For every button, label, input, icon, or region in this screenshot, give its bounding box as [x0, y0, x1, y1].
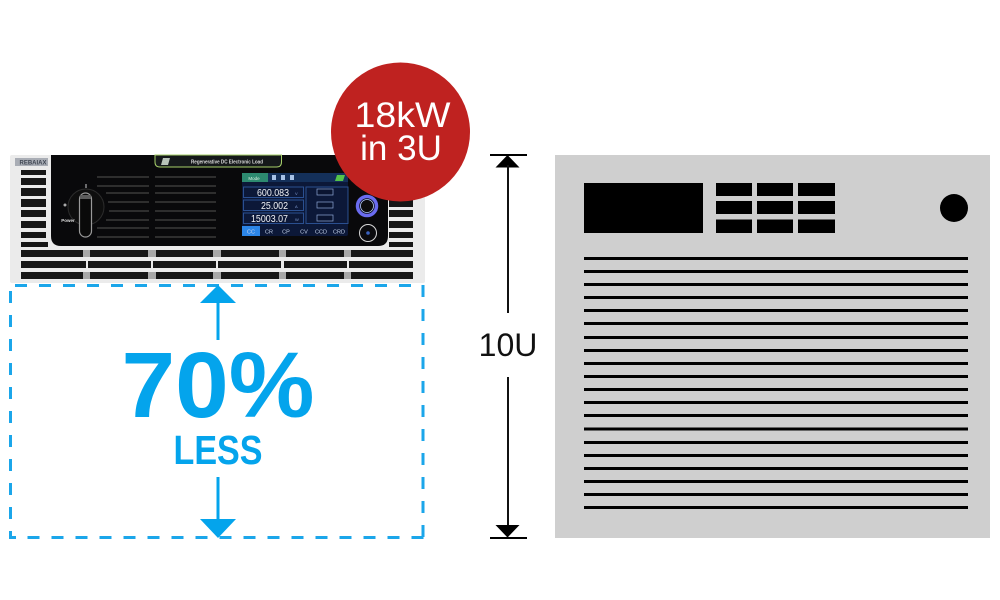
dimension line: 10U height — [479, 154, 537, 539]
red badge: 18kW in 3U: 18kW — [354, 96, 450, 135]
arrow up — [200, 285, 236, 340]
brand logo — [15, 158, 48, 166]
left vent slots — [21, 170, 48, 247]
touch screen: CR — [265, 230, 273, 236]
enter button — [360, 224, 376, 242]
button grid — [716, 183, 835, 233]
dimension line: 10U height: 10U — [479, 327, 537, 363]
model title tab — [155, 155, 282, 167]
red badge: 18kW in 3U — [331, 62, 470, 202]
power rotary switch: Power — [61, 218, 75, 223]
touch screen: CV — [300, 230, 308, 236]
bottom vent slots — [21, 250, 413, 279]
right vent slots — [389, 170, 413, 247]
touch screen: W — [295, 217, 299, 222]
touch screen: 600.083 — [257, 188, 289, 199]
encoder knob with blue ring — [358, 196, 376, 216]
touch screen: CC — [247, 230, 255, 236]
touch screen: 25.002 — [261, 201, 288, 212]
power rotary switch — [61, 184, 104, 237]
70% figure: 70% — [122, 333, 314, 437]
dashed outline: space saved — [9, 285, 424, 538]
product photo: 3U regenerative DC electronic load — [10, 155, 425, 283]
round knob — [940, 194, 968, 222]
conventional 10U unit — [555, 155, 990, 538]
touch screen: CRD — [333, 230, 345, 236]
touch screen: V — [295, 191, 298, 196]
brand logo: REBAIAX — [19, 160, 47, 166]
display block — [584, 183, 703, 233]
red badge: 18kW in 3U: in 3U — [360, 129, 442, 168]
panel vent lines — [97, 177, 216, 237]
model title tab: Regenerative DC Electronic Load — [191, 160, 263, 166]
touch screen: CCD — [315, 230, 327, 236]
arrow down — [200, 477, 236, 538]
touch screen: Mode — [248, 176, 260, 181]
touch screen — [242, 173, 348, 236]
vent lines — [584, 257, 968, 509]
black front panel — [51, 155, 388, 246]
touch screen: CP — [282, 230, 290, 236]
touch screen: A — [295, 204, 298, 209]
touch screen: 15003.07 — [251, 214, 288, 225]
LESS label: LESS — [174, 427, 262, 473]
